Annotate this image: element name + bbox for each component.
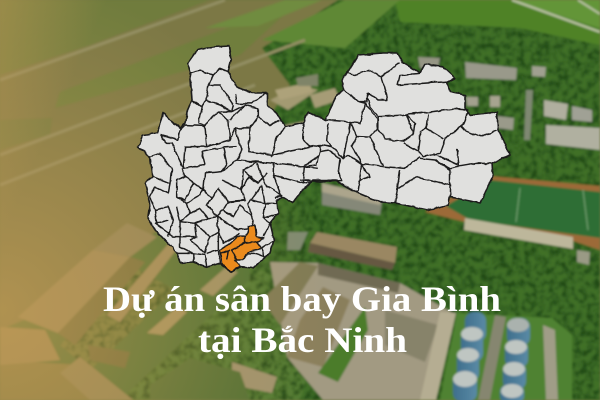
title <box>103 279 501 360</box>
left terminal buildings <box>0 327 60 365</box>
top right crop fields <box>395 0 600 45</box>
campus buildings <box>465 62 517 80</box>
tank yard <box>440 313 572 400</box>
runway grass strips <box>0 0 210 75</box>
airfield ground <box>0 0 338 330</box>
lower foliage clumps <box>150 358 250 400</box>
buildings behind the map <box>270 85 318 110</box>
map: east communes borders <box>300 63 497 203</box>
tanks <box>453 312 530 400</box>
map: highlighted Gia Binh area <box>220 225 263 272</box>
title line 2: tại Bắc Ninh <box>198 320 407 360</box>
football field and track <box>425 176 600 250</box>
map: west communes borders <box>150 68 318 267</box>
map: province silhouette <box>138 46 510 272</box>
map of Bac Ninh province communes <box>138 46 510 272</box>
title line 1: Dự án sân bay Gia Bình <box>103 279 501 319</box>
central buildings and apron <box>310 232 397 263</box>
